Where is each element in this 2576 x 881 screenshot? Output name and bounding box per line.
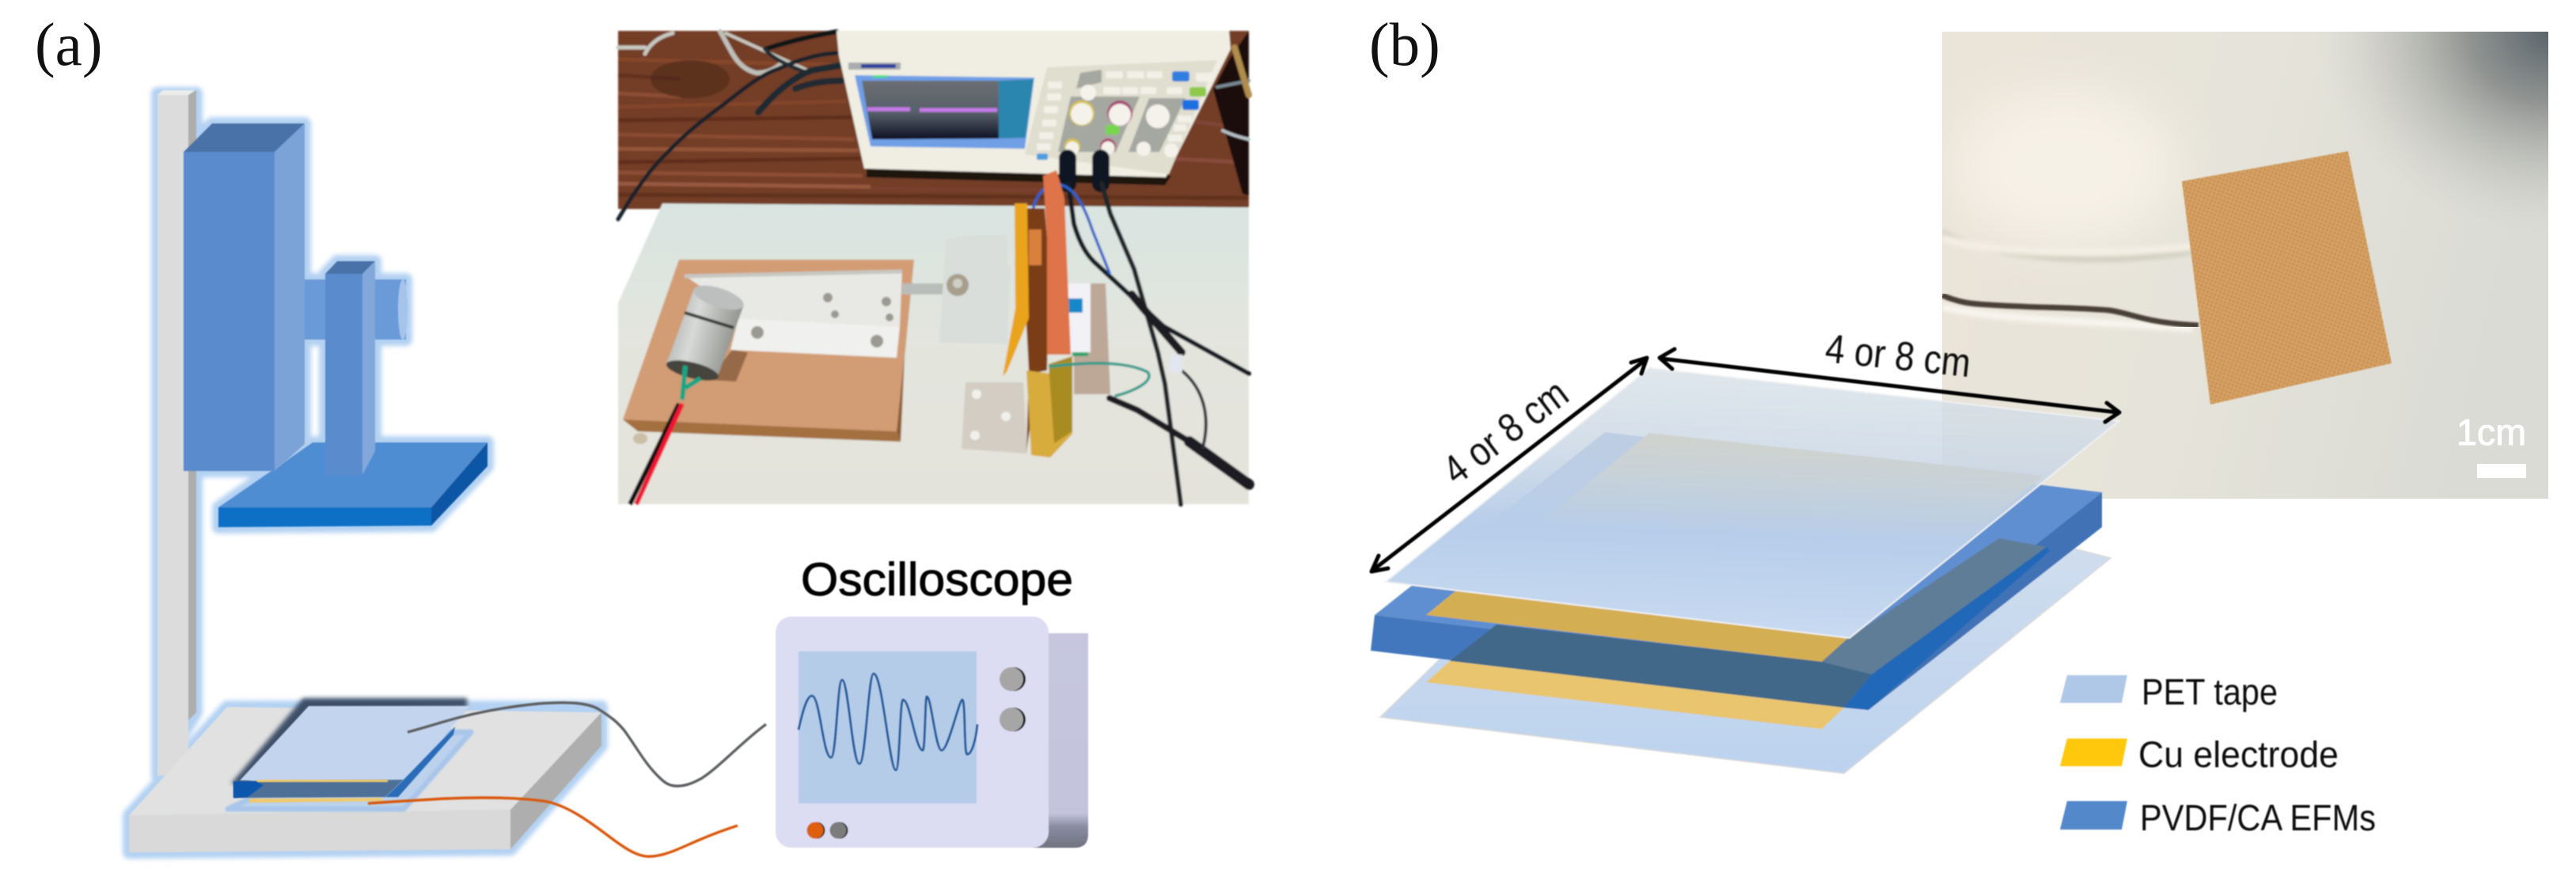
screen bezel — [855, 75, 1034, 149]
control panel — [1025, 60, 1217, 174]
folded sensor assembly — [1003, 170, 1072, 458]
upper copper electrode — [1426, 433, 2043, 662]
legend item: PVDF/CA EFMs: PVDF/CA EFMs — [2140, 797, 2376, 838]
photo: laboratory test setup — [618, 31, 1249, 504]
motor shadow — [708, 350, 748, 382]
oscilloscope body — [837, 31, 1231, 177]
upper bracket plate — [685, 271, 902, 326]
dimension arrow: back edge — [1660, 349, 2119, 422]
sensor shadow and bottom PET — [228, 698, 471, 809]
sensor sample on stage — [228, 698, 471, 809]
orange signal wire — [368, 798, 738, 856]
oscilloscope icon — [776, 617, 1088, 848]
linear motor platform — [623, 260, 946, 504]
fabric folds — [1942, 232, 2192, 328]
soft keys — [1037, 71, 1213, 150]
circuit board — [1068, 283, 1110, 394]
waveform — [799, 674, 977, 770]
illustration: vibration test stand — [129, 90, 601, 853]
blue film side — [385, 727, 455, 797]
horizontal cylinder — [289, 279, 408, 340]
soft blue glow around stand — [129, 93, 601, 853]
wooden desk — [618, 31, 1249, 209]
dark background corner — [1213, 31, 1249, 196]
bottom PET tape — [1380, 443, 2111, 773]
brand strip — [848, 63, 901, 70]
red and black power leads — [630, 404, 679, 504]
copper strips — [249, 780, 388, 803]
bench oscilloscope — [837, 31, 1231, 177]
drive rod — [902, 283, 946, 294]
knob sections — [1058, 70, 1186, 152]
column — [157, 90, 196, 776]
legend item: PVDF/CA EFMs — [2060, 797, 2376, 838]
coloured buttons — [1037, 71, 1206, 160]
copper sensor patch — [2182, 151, 2392, 404]
vertical post — [325, 261, 375, 475]
oscilloscope shadow — [867, 168, 1171, 185]
probe and green jumper — [1050, 294, 1249, 484]
panel label (a): (a) — [35, 10, 102, 78]
menu panel — [999, 79, 1034, 139]
warm fabric highlight — [1967, 94, 2170, 239]
oscilloscope front face — [776, 617, 1049, 848]
acrylic clamp — [939, 235, 1011, 344]
oscilloscope heading: Oscilloscope — [801, 554, 1073, 606]
upper plate — [218, 442, 488, 527]
screen display — [862, 81, 999, 139]
base plate — [129, 707, 601, 853]
lower bracket plate — [730, 318, 900, 358]
photo background — [1942, 32, 2548, 499]
dimension label: back edge: 4 or 8 cm — [1823, 325, 1973, 385]
top PET tape — [1386, 368, 2119, 638]
scale bar — [2477, 464, 2526, 478]
oscilloscope side face — [1033, 633, 1088, 848]
green leads — [682, 366, 700, 400]
legend — [2060, 671, 2376, 838]
dimension label: left edge: 4 or 8 cm — [1434, 370, 1576, 493]
right overlap region — [1822, 538, 2047, 674]
dark corner shading — [2350, 32, 2548, 199]
blue film corner — [233, 781, 264, 798]
photo: fabricated sensor on fabric — [1942, 32, 2548, 499]
cables on desk — [618, 32, 1249, 219]
bright blue edge — [1844, 547, 2050, 710]
legend item: PET tape — [2060, 671, 2278, 712]
BNC probes and cables — [1031, 158, 1249, 504]
exploded device structure — [1371, 368, 2119, 773]
wooden mount board — [623, 260, 914, 431]
lower copper electrode — [1426, 661, 1844, 729]
scale label: 1cm — [2456, 412, 2526, 453]
top PET sheet — [240, 706, 471, 780]
dial knobs — [1064, 85, 1178, 158]
round knobs — [1000, 667, 1026, 731]
input ports — [807, 822, 848, 839]
legend item: PET tape: PET tape — [2142, 671, 2278, 712]
motor cylinder — [666, 289, 744, 376]
white base board — [618, 203, 1249, 504]
PVDF/CA membrane frame — [1371, 432, 2102, 710]
signal trace — [867, 109, 997, 110]
large motor block — [184, 123, 305, 471]
sensor lead wire — [1942, 295, 2199, 325]
dark film edge — [233, 780, 404, 798]
dimension arrow: left edge — [1371, 358, 1647, 572]
legend item: Cu electrode: Cu electrode — [2138, 734, 2339, 775]
panel label (b): (b) — [1369, 10, 1440, 78]
bracket bolts — [751, 293, 893, 347]
front dark band — [1450, 625, 1872, 708]
oscilloscope screen — [799, 651, 977, 803]
grey signal wire — [408, 703, 766, 786]
lower metal bracket — [962, 382, 1027, 454]
ground lug — [633, 433, 647, 444]
